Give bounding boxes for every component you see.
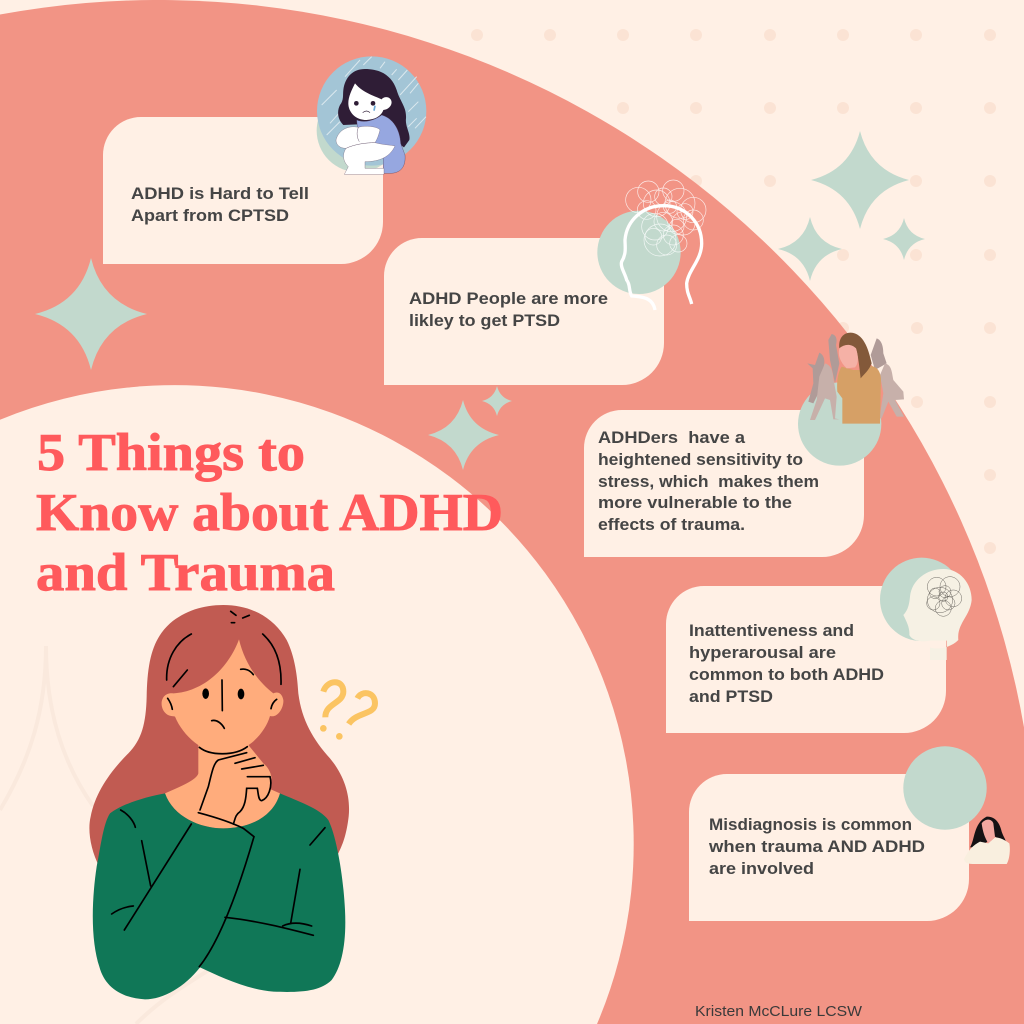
card 4: common to both ADHD xyxy=(689,665,884,684)
title: Know about ADHD xyxy=(36,484,503,542)
card 2: ADHD People are more xyxy=(409,289,608,308)
card 1: ADHD is Hard to Tell xyxy=(131,184,309,203)
card 2: likley to get PTSD xyxy=(409,311,560,330)
sparkle: left large xyxy=(35,258,147,370)
sparkle group: centre xyxy=(428,386,512,470)
title: and Trauma xyxy=(36,544,335,602)
card 3: effects of trauma. xyxy=(598,515,745,534)
card 1: Apart from CPTSD xyxy=(131,206,289,225)
face xyxy=(162,639,283,753)
icon: woman holding her head xyxy=(964,817,1010,864)
card 3: stress, which makes them xyxy=(598,472,819,491)
title xyxy=(36,424,503,602)
card 4: hyperarousal are xyxy=(689,643,836,662)
icon: crying girl in rain xyxy=(317,56,426,174)
illustration: thinking woman xyxy=(89,605,375,999)
title: 5 Things to xyxy=(37,424,305,482)
card 5: when trauma AND ADHD xyxy=(708,837,925,856)
icon: head with tangled thoughts xyxy=(880,558,972,660)
sparkle group: upper right xyxy=(778,131,925,281)
cream inner circle xyxy=(0,385,634,1024)
card 3 xyxy=(584,410,864,557)
circle accent: card 5 xyxy=(903,746,987,830)
card 5: are involved xyxy=(709,859,814,878)
icon: head outline with scribble thoughts xyxy=(597,180,706,310)
card 3: heightened sensitivity to xyxy=(598,450,803,469)
card 3: more vulnerable to the xyxy=(598,493,792,512)
card 5 xyxy=(689,774,969,921)
card 4: and PTSD xyxy=(689,687,773,706)
eyes xyxy=(202,688,209,699)
card 5: Misdiagnosis is common xyxy=(709,815,912,834)
icon: overwhelmed woman with passing silhouettes xyxy=(798,333,904,466)
card 2 xyxy=(384,238,664,385)
line art xyxy=(112,611,325,967)
hair xyxy=(89,605,349,867)
sweater xyxy=(93,793,345,999)
card 4: Inattentiveness and xyxy=(689,621,854,640)
card 3: ADHDers have a xyxy=(598,428,746,447)
question marks xyxy=(323,682,375,724)
card 4 xyxy=(666,586,946,733)
card 1 xyxy=(103,117,383,264)
skin: neck, hand and chest xyxy=(165,740,280,828)
credit: Kristen McCLure LCSW xyxy=(695,1003,863,1020)
